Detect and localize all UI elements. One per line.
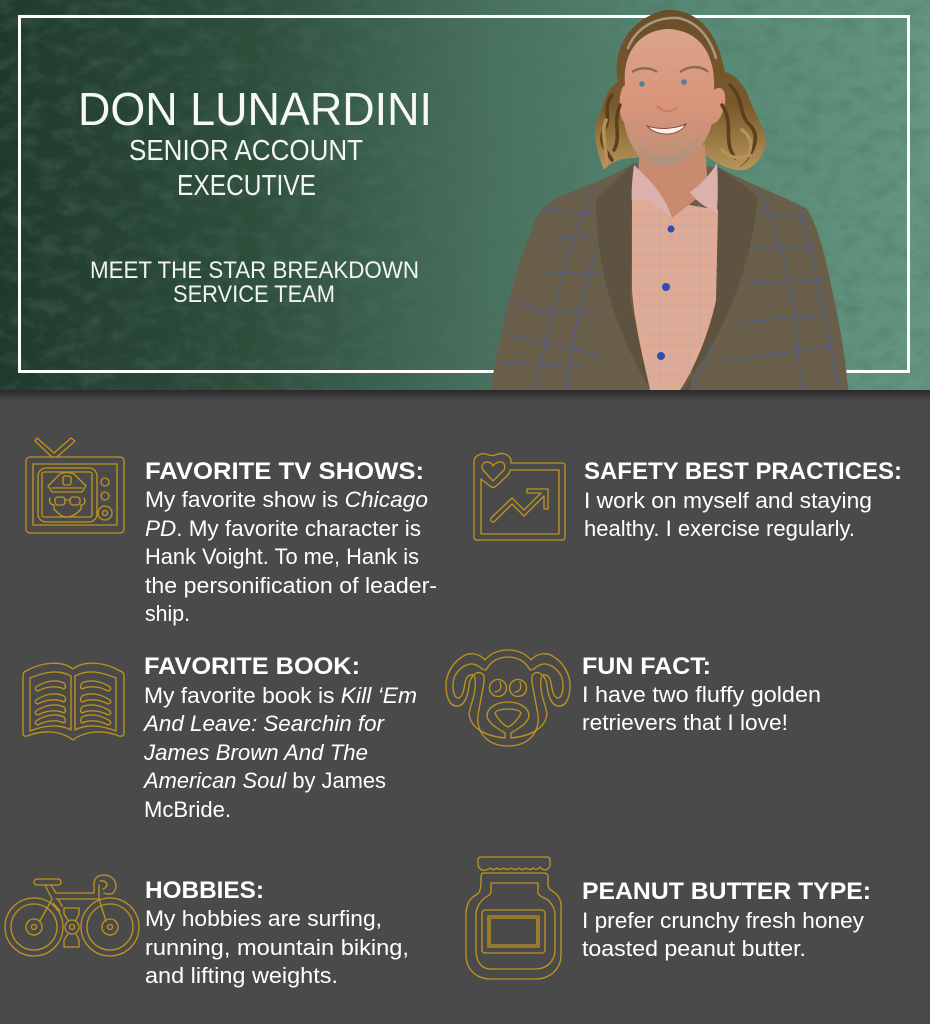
curls	[602, 18, 755, 166]
nose	[657, 106, 677, 111]
body text: My favorite book is Kill ‘Em	[144, 683, 417, 708]
face	[620, 29, 725, 168]
back hair	[595, 10, 766, 170]
subtitle	[90, 257, 419, 308]
icon: heart and rising chart	[474, 454, 565, 540]
icon: open book	[23, 663, 124, 740]
jacket windowpane lines	[500, 190, 838, 390]
item: hobbies	[5, 875, 409, 988]
item: favorite TV shows	[26, 438, 437, 626]
body text: toasted peanut butter.	[582, 936, 806, 961]
neck	[637, 145, 708, 218]
body text	[584, 488, 872, 541]
portrait photo illustration	[491, 10, 848, 390]
icon: jar	[466, 857, 561, 979]
body text: American Soul by James	[142, 768, 386, 793]
heading: FAVORITE TV SHOWS:	[145, 458, 424, 485]
body text	[582, 682, 821, 735]
subtitle: SERVICE TEAM	[173, 281, 335, 308]
body text: running, mountain biking,	[145, 935, 409, 960]
job title: SENIOR ACCOUNT	[129, 135, 363, 167]
body text: and lifting weights.	[145, 963, 338, 988]
shirt buttons	[657, 226, 674, 360]
body text: My hobbies are surfing,	[145, 906, 382, 931]
heading: PEANUT BUTTER TYPE:	[582, 878, 871, 905]
body text: the personification of leader-	[145, 573, 437, 598]
job title: EXECUTIVE	[177, 170, 316, 202]
item: fun fact	[446, 650, 821, 746]
jacket	[491, 163, 848, 390]
collar	[632, 165, 672, 218]
body text: ship.	[145, 601, 190, 626]
item: safety best practices	[474, 454, 902, 541]
body text: My favorite show is Chicago	[145, 487, 428, 512]
eyebrows	[632, 67, 708, 72]
subtitle: MEET THE STAR BREAKDOWN	[90, 257, 419, 284]
shirt	[632, 195, 718, 390]
body text: Hank Voight. To me, Hank is	[145, 544, 419, 569]
body text: I have two fluffy golden	[582, 682, 821, 707]
white frame	[20, 16, 908, 372]
body text	[142, 683, 417, 822]
beard stubble	[636, 132, 700, 163]
body text	[145, 487, 437, 626]
body text: I work on myself and staying	[584, 488, 872, 513]
heading: FAVORITE BOOK:	[144, 653, 360, 680]
job title	[129, 135, 363, 202]
icon: bicycle	[5, 875, 139, 956]
item: favorite book	[23, 653, 417, 822]
eyes	[639, 79, 687, 87]
body text: I prefer crunchy fresh honey	[582, 908, 864, 933]
lapels	[596, 163, 652, 390]
name title: DON LUNARDINI	[78, 83, 432, 135]
icon: dog face	[446, 650, 570, 746]
body text: And Leave: Searchin for	[142, 711, 386, 736]
header banner	[0, 0, 930, 401]
heading: FUN FACT:	[582, 653, 711, 680]
jacket grain	[491, 163, 848, 390]
icon: TV with police officer	[26, 438, 124, 533]
body text: healthy. I exercise regularly.	[584, 516, 855, 541]
body text: retrievers that I love!	[582, 710, 788, 735]
body text: McBride.	[144, 797, 231, 822]
item: peanut butter type	[466, 857, 871, 979]
heading: HOBBIES:	[145, 877, 264, 904]
body text: James Brown And The	[143, 740, 368, 765]
body text	[145, 906, 409, 988]
body text: PD. My favorite character is	[145, 516, 421, 541]
heading: SAFETY BEST PRACTICES:	[584, 458, 902, 485]
body text	[582, 908, 864, 961]
smile	[647, 124, 686, 134]
